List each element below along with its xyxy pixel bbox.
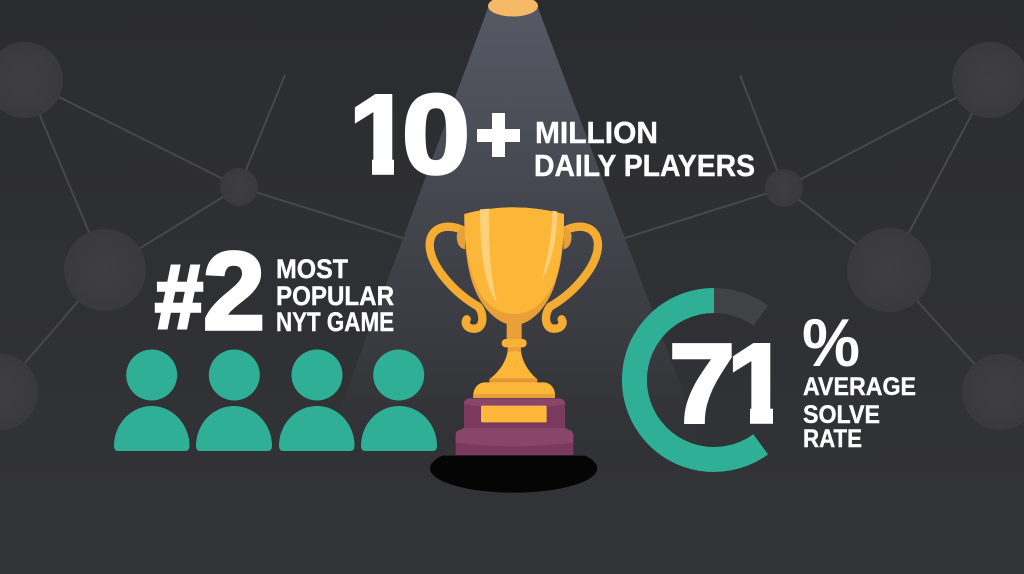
cup highlights	[480, 209, 557, 303]
stat: #2 most popular	[155, 230, 394, 353]
stem	[489, 323, 537, 383]
handles	[430, 227, 598, 329]
stat: 71% average solve rate	[672, 318, 916, 448]
plus sign	[477, 113, 520, 157]
shadow	[430, 456, 598, 493]
label: average solve rate	[803, 373, 916, 453]
number: 10: 0	[402, 72, 470, 197]
number: 10	[354, 92, 467, 176]
number: #2	[155, 230, 265, 353]
label: most popular nyt game: POPULAR	[276, 281, 394, 311]
spotlight beam	[325, 8, 705, 450]
cup front	[464, 207, 564, 314]
label: average solve rate: AVERAGE	[803, 373, 916, 401]
number: 71	[672, 343, 773, 424]
number: 10: 1	[349, 72, 411, 197]
person 4	[361, 350, 437, 451]
person 1	[114, 350, 190, 451]
icon: four people	[114, 350, 437, 451]
number: 71: 1	[727, 321, 789, 446]
filled segment	[634, 300, 761, 459]
name plate	[481, 406, 547, 422]
label: most popular nyt game: MOST	[276, 254, 348, 284]
label: million daily players: DAILY PLAYERS	[534, 148, 755, 183]
number: #2: #	[155, 248, 203, 348]
network: left	[0, 42, 425, 430]
percent sign: %	[802, 305, 860, 381]
donut chart: 71%	[634, 300, 761, 459]
cup	[464, 207, 564, 325]
label: average solve rate: RATE	[803, 425, 862, 453]
network: right	[625, 42, 1024, 430]
label: million daily players: MILLION	[535, 115, 658, 150]
purple pedestal	[456, 398, 573, 455]
label: average solve rate: SOLVE	[803, 401, 880, 429]
stat: 10+ million daily players	[354, 92, 754, 176]
label: million daily players	[534, 115, 755, 183]
number: #2: 2	[203, 230, 265, 353]
label: most popular nyt game	[276, 254, 394, 337]
trophy	[430, 207, 598, 493]
person 2	[196, 350, 272, 451]
remaining segment	[714, 300, 761, 316]
person 3	[279, 350, 354, 451]
spotlight lamp	[488, 0, 538, 16]
handle joints	[457, 227, 572, 249]
gold base	[473, 382, 555, 398]
number: 71: 7	[669, 321, 735, 446]
label: most popular nyt game: NYT GAME	[276, 307, 394, 337]
